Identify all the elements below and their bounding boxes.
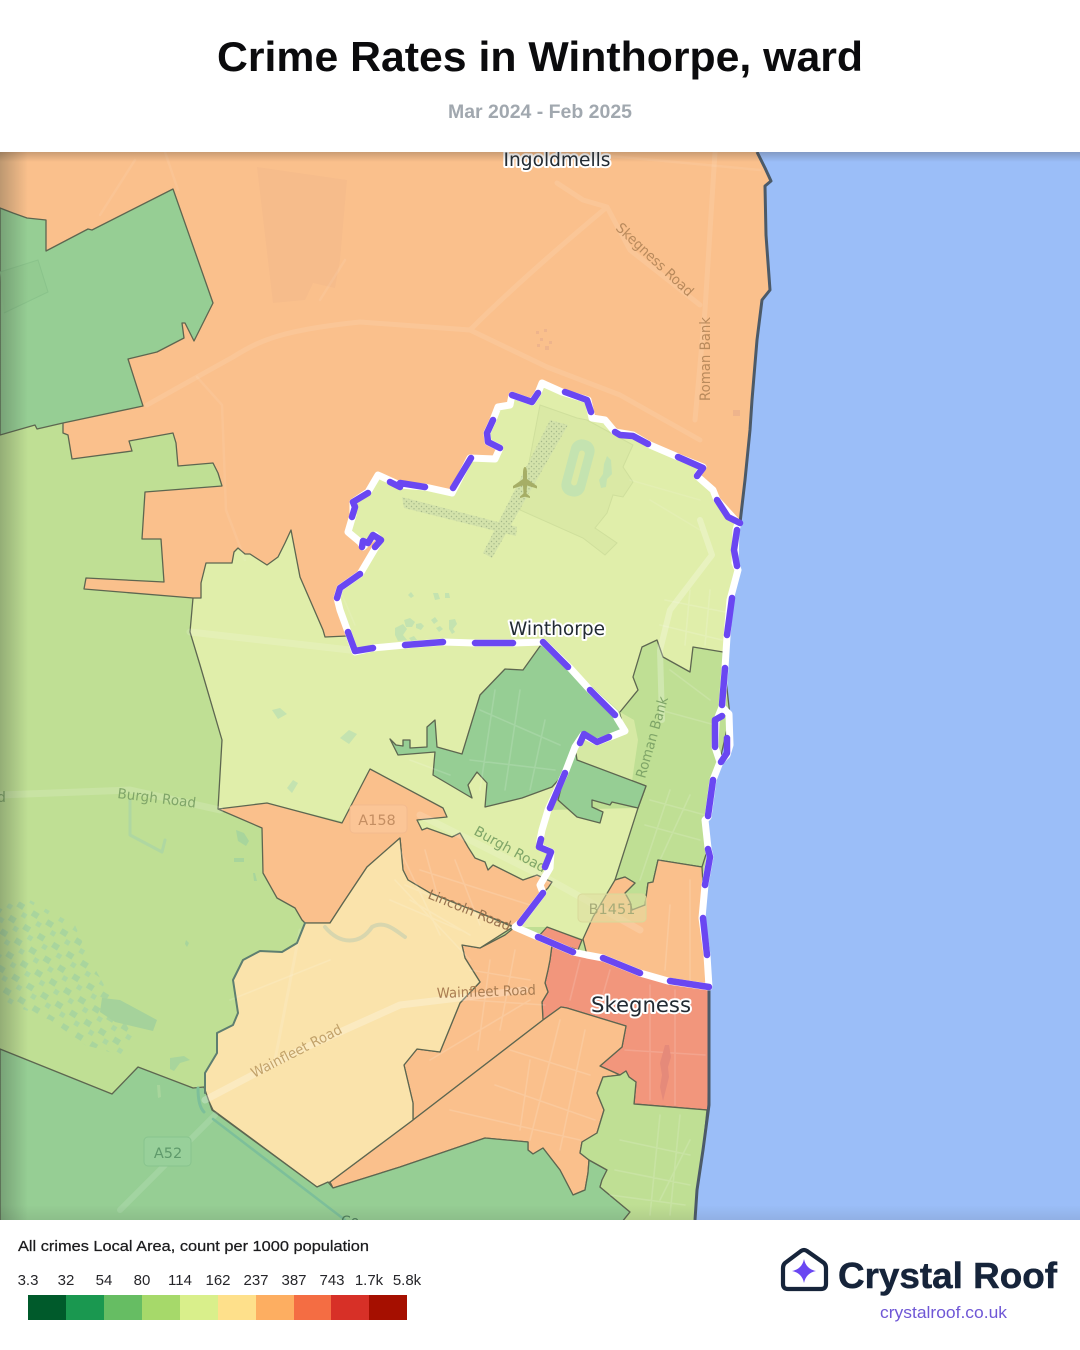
- ward boundary: [337, 383, 740, 987]
- legend scale labels: 114: [168, 1272, 192, 1289]
- farm outline on north-west green: [0, 260, 48, 313]
- boundary lines of orange north and pale west: [63, 423, 347, 809]
- road shield: A158: [350, 805, 407, 833]
- choropleth map: [0, 150, 1080, 1230]
- label: Skegness Road: Skegness Road: [612, 220, 696, 300]
- legend scale labels: 743: [319, 1272, 345, 1289]
- buildings on north orange: [536, 329, 740, 416]
- legend scale labels: 32: [58, 1272, 74, 1289]
- region: dark green south: [0, 1049, 630, 1222]
- region: dark green central: [390, 642, 625, 807]
- region: orange east of Roman Bank: [583, 860, 709, 987]
- region: coral Skegness centre: [542, 945, 709, 1110]
- place label: Skegness: Skegness: [591, 993, 691, 1018]
- legend scale labels: 387: [281, 1272, 307, 1289]
- label: Lincoln Road: Lincoln Road: [426, 887, 513, 935]
- road shield: B1451: [578, 894, 646, 922]
- river and canal: [198, 923, 405, 1220]
- airfield apron: [520, 405, 633, 555]
- boating lake Skegness: [660, 1045, 671, 1101]
- region: Winthorpe ward fill: [337, 383, 738, 712]
- icon: house with star: [783, 1250, 826, 1289]
- label: Wainfleet Road west: Wainfleet Road: [249, 1022, 345, 1082]
- legend scale labels: [18, 1272, 422, 1289]
- region: orange A158: [218, 769, 552, 927]
- region: high-crime orange north: [0, 152, 771, 637]
- region: light green east strip: [614, 639, 730, 909]
- region: yellow Wainfleet: [205, 838, 513, 1187]
- legend scale labels: 237: [243, 1272, 269, 1289]
- label: Wainfleet Road east: Wainfleet Road: [437, 983, 536, 1002]
- region: dark green north-west: [0, 189, 213, 435]
- lighter patch on east strip: [575, 712, 638, 781]
- region: orange west Skegness: [404, 927, 552, 1120]
- region: pale green west of ward: [190, 530, 638, 939]
- logo: Crystal Roof: [783, 1250, 1058, 1322]
- region: dark green pocket: [558, 747, 646, 823]
- website url: crystalroof.co.uk: [880, 1303, 1008, 1322]
- region: small coral sliver: [538, 927, 582, 950]
- ponds: [272, 437, 612, 793]
- label: Burgh Road east: Burgh Road: [471, 824, 549, 876]
- title: Crime Rates in Winthorpe, ward: [217, 33, 863, 80]
- label: Roman Bank north: Roman Bank: [698, 316, 714, 401]
- legend scale labels: 5.8k: [393, 1272, 422, 1289]
- legend scale labels: 1.7k: [355, 1272, 384, 1289]
- chalet park: [0, 830, 257, 1098]
- legend colour bar: [28, 1295, 407, 1320]
- legend: [18, 1238, 422, 1320]
- road shield: A52: [144, 1137, 191, 1166]
- land base: mid-green area: [0, 424, 706, 1184]
- region: light green south-east: [580, 1071, 707, 1222]
- roads: [0, 152, 760, 1215]
- coastline: [695, 152, 771, 1220]
- road shield: B1451: B1451: [589, 902, 635, 918]
- label: Burgh Road west: Burgh Road: [117, 786, 197, 812]
- icon: airport plane: [513, 467, 537, 498]
- legend scale labels: 162: [205, 1272, 231, 1289]
- road shield: A158: A158: [358, 813, 396, 829]
- subtitle: date range: Mar 2024 - Feb 2025: [448, 102, 632, 123]
- wordmark: Crystal Roof: [838, 1255, 1058, 1296]
- road shield: A52: A52: [154, 1146, 182, 1162]
- place label: Ingoldmells: Ingoldmells: [504, 150, 610, 171]
- legend scale labels: 80: [134, 1272, 150, 1289]
- label: Roman Bank south: Roman Bank: [633, 694, 672, 780]
- runways: [402, 420, 568, 558]
- sea: [696, 152, 1080, 1220]
- legend scale labels: 3.3: [18, 1272, 38, 1289]
- place label: Winthorpe: Winthorpe: [509, 619, 605, 640]
- orange fields detail: [257, 167, 347, 303]
- label: Coast fragment at bottom: Co: [341, 1214, 359, 1230]
- legend scale labels: 54: [96, 1272, 112, 1289]
- legend title: All crimes Local Area, count per 1000 population: [18, 1238, 369, 1255]
- region: big orange south Skegness: [330, 1007, 626, 1195]
